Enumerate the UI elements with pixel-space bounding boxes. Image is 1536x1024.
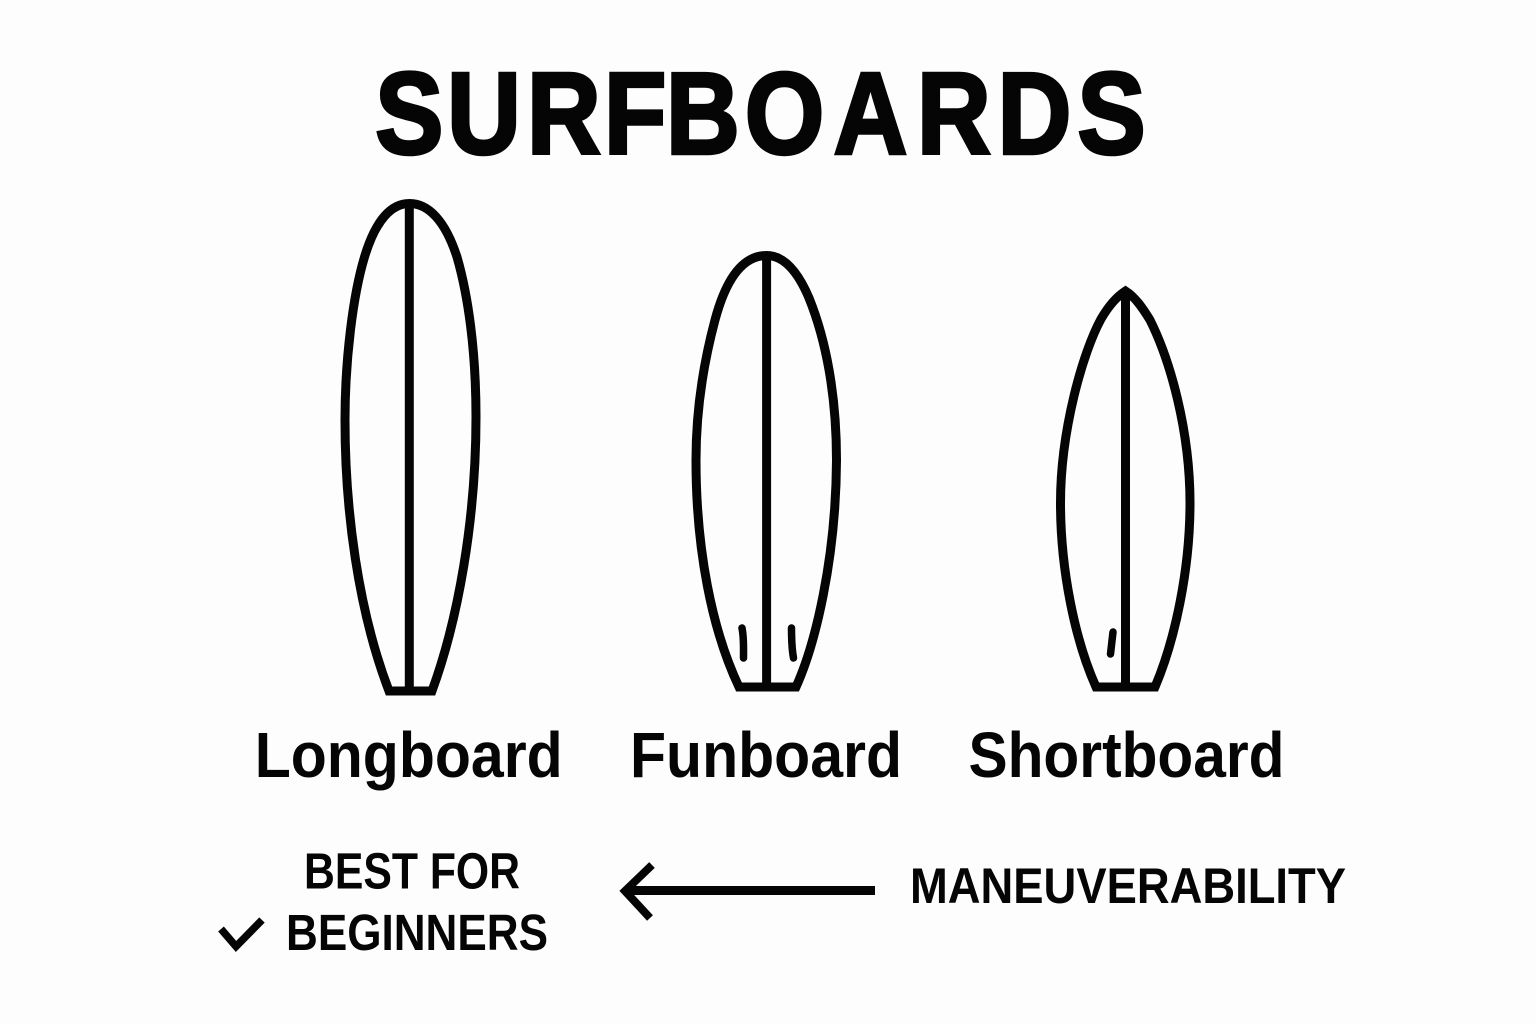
icon: shortboard fin [1110,632,1113,654]
text: maneuverability: MANEUVERABILITY [910,858,1346,914]
icon: funboard fins [742,628,794,658]
label: funboard: Funboard [630,719,902,791]
text: beginners: BEGINNERS [286,904,548,961]
label: longboard: Longboard [255,719,563,791]
arrow: pointing left [625,865,875,918]
icon: check mark [221,920,262,946]
label: shortboard: Shortboard [968,719,1284,791]
surfboard: funboard [696,256,836,687]
title: SURFBOARDS [375,49,1146,179]
text: best for: BEST FOR [304,842,520,900]
surfboard: shortboard [1060,289,1190,687]
surfboard: longboard [345,204,476,691]
